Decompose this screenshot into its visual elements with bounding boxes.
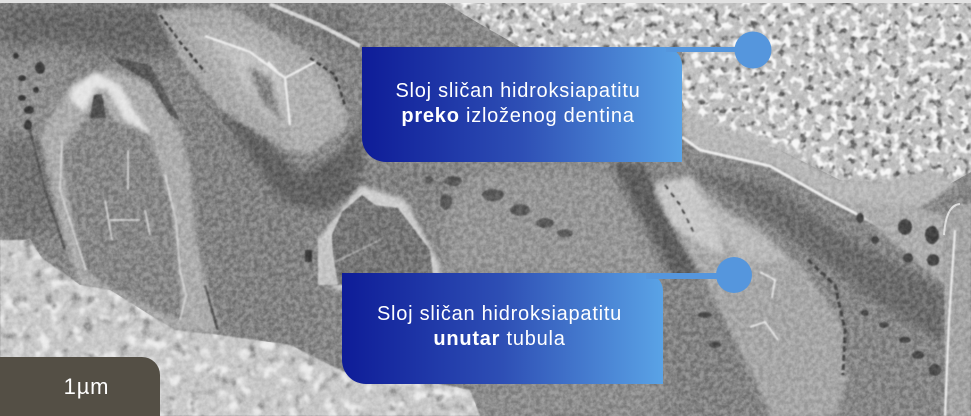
callout: over exposed dentine: Sloj sličan hidroksiapatitu [395, 80, 641, 102]
connector and marker: bottom callout [646, 257, 752, 293]
plate: right with large tubule [655, 175, 846, 416]
porous mineral layer, top right [445, 3, 971, 184]
callout: inside tubules: Sloj sličan hidroksiapatitu [377, 303, 622, 325]
smooth band under porous layer [682, 105, 955, 285]
callout: inside tubules: unutar tubula [433, 328, 566, 350]
scale label [0, 357, 160, 416]
connector and marker: top callout [666, 32, 772, 68]
callout: inside tubules [342, 273, 663, 384]
tubule: centre [305, 185, 440, 290]
bright column at right edge [944, 204, 971, 416]
holes in central plate [425, 176, 573, 237]
holes lower right [698, 310, 941, 376]
tubule: left [30, 68, 220, 333]
scale label: 1µm [64, 374, 109, 399]
pores at far left [13, 53, 180, 130]
tubule: top centre [155, 4, 360, 155]
pale top edge [0, 0, 971, 3]
rough bright layer, bottom left [0, 235, 490, 416]
dark channels [170, 40, 945, 345]
callout: over exposed dentine: preko izloženog dentina [401, 105, 635, 127]
callout: over exposed dentine [362, 47, 682, 162]
